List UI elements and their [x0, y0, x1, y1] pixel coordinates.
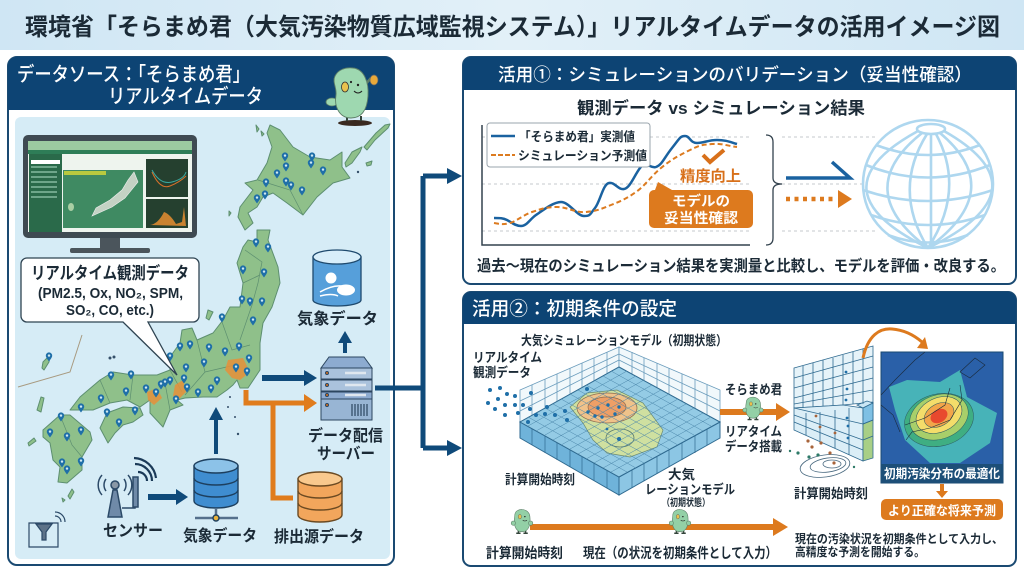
- label: realtime observation data: リアルタイム: [473, 350, 542, 365]
- callout: realtime observation data: SO₂, CO, etc.): [66, 302, 154, 319]
- callout: model validation: 妥当性確認: [664, 210, 738, 226]
- callout: realtime observation data: [21, 258, 199, 375]
- icon: monitor with Soramame website: [23, 135, 197, 253]
- label: realtime observation data: 観測データ: [473, 365, 531, 380]
- panel heading: application 1: 活用①：シミュレーションのバリデーション（妥当性確認）: [498, 64, 972, 85]
- label: model caption: （初期状態）: [662, 496, 710, 509]
- label: atmospheric simulation model: 大気シミュレーションモデル（初期状態）: [521, 333, 727, 348]
- label: data distribution server: サーバー: [317, 445, 375, 463]
- icon: sensor tower: [98, 458, 156, 517]
- label: calculation start time: 計算開始時刻: [794, 486, 868, 501]
- title band: 環境省「そらまめ君（大気汚染物質広域監視システム）」リアルタイムデータの活用イメージ図: [25, 13, 1000, 41]
- label: realtime data loaded: データ搭載: [725, 439, 782, 454]
- arrow: server to both applications: [375, 168, 462, 456]
- icon: globe: [863, 120, 993, 248]
- panel heading: data source: リアルタイムデータ: [108, 84, 263, 108]
- chart heading: 観測データ vs シミュレーション結果: [577, 98, 865, 118]
- panel heading: data source: [17, 62, 263, 108]
- arrow: curved to heat map: [863, 329, 928, 358]
- arrow: orange dotted: [786, 190, 852, 208]
- observation data points: [486, 386, 621, 441]
- label: start time: 計算開始時刻: [486, 545, 563, 561]
- callout: realtime observation data: (PM2.5, Ox, NO₂, SPM,: [38, 285, 183, 302]
- panel: application 1 validation: [463, 57, 1016, 284]
- arrow: blue half-head: [786, 162, 850, 178]
- icon: check mark: [703, 150, 724, 162]
- map of Japan: [18, 124, 390, 502]
- panel: application 2 initial conditions: [463, 292, 1016, 566]
- icon: mascot at start: [511, 509, 533, 533]
- panel: data source: [8, 57, 394, 565]
- 3D simulation grid box: [520, 347, 720, 495]
- panel heading: application 2: 活用②：初期条件の設定: [472, 298, 677, 320]
- icon: mascot Soramame-kun: [326, 68, 378, 126]
- label: improved accuracy: 精度向上: [680, 167, 741, 185]
- label: realtime data loaded: [725, 424, 782, 454]
- label: model caption: レーションモデル: [645, 482, 735, 497]
- panel heading: data source: データソース：「そらまめ君」: [17, 62, 250, 86]
- icon: orange emission database: [298, 472, 342, 522]
- timeline arrow: [511, 509, 788, 536]
- label: realtime data loaded: リアタイム: [725, 424, 782, 439]
- legend: シミュレーション予測値: [518, 148, 647, 163]
- callout: model validation: [649, 182, 753, 228]
- button: more accurate forecast: [881, 499, 1003, 520]
- title band: [0, 0, 1024, 50]
- arrow: map to server: [262, 370, 317, 386]
- arrow: emission data to server: [246, 390, 305, 498]
- label: calculation start time: 計算開始時刻: [505, 472, 575, 487]
- label: realtime observation data: [473, 350, 542, 380]
- label: data distribution server: データ配信: [308, 426, 383, 445]
- heat map: optimized initial pollution distribution: [881, 352, 1003, 483]
- label: present: 現在（の状況を初期条件として入力）: [583, 545, 777, 561]
- icon: sampling funnel: [29, 512, 65, 547]
- arrow: weather data to map: [209, 407, 223, 454]
- label: sensor: センサー: [103, 522, 163, 540]
- callout: realtime observation data: リアルタイム観測データ: [31, 263, 189, 283]
- arrow: server to weather data: [338, 331, 352, 353]
- arrow: down to forecast: [936, 484, 948, 498]
- label: model caption: 大気: [668, 467, 695, 482]
- callout: model validation: モデルの: [672, 193, 730, 209]
- legend: 「そらまめ君」実測値: [519, 129, 635, 144]
- arrow: sensor to database: [148, 489, 188, 505]
- icon: grid slab: [794, 346, 873, 461]
- label: weather data: 気象データ: [183, 526, 257, 545]
- caption: application 2: 高精度な予測を開始する。: [795, 544, 925, 559]
- icon: small mascot: [743, 397, 763, 420]
- icon: contours and dots: [789, 439, 855, 480]
- icon: weather database (top): [313, 250, 361, 306]
- icon: data distribution server: [321, 357, 372, 420]
- icon: blue database: [194, 459, 238, 521]
- arrow: data loading: [720, 403, 790, 421]
- caption: application 2: 現在の汚染状況を初期条件として入力し、: [795, 531, 1003, 546]
- label: data distribution server: [308, 426, 383, 463]
- label: model caption: [645, 467, 735, 509]
- heat map: optimized initial pollution distribution: 初期汚染分布の最適化: [884, 466, 1000, 481]
- brace: [766, 135, 782, 245]
- icon: mascot at present: [669, 509, 691, 533]
- label: Soramame-kun: そらまめ君: [725, 382, 782, 397]
- label: weather data: 気象データ: [297, 309, 378, 328]
- button: more accurate forecast: より正確な将来予測: [888, 503, 996, 518]
- line chart: [482, 123, 877, 245]
- legend: [487, 123, 650, 167]
- caption: application 2: [795, 531, 1003, 559]
- label: emission data: 排出源データ: [274, 527, 364, 546]
